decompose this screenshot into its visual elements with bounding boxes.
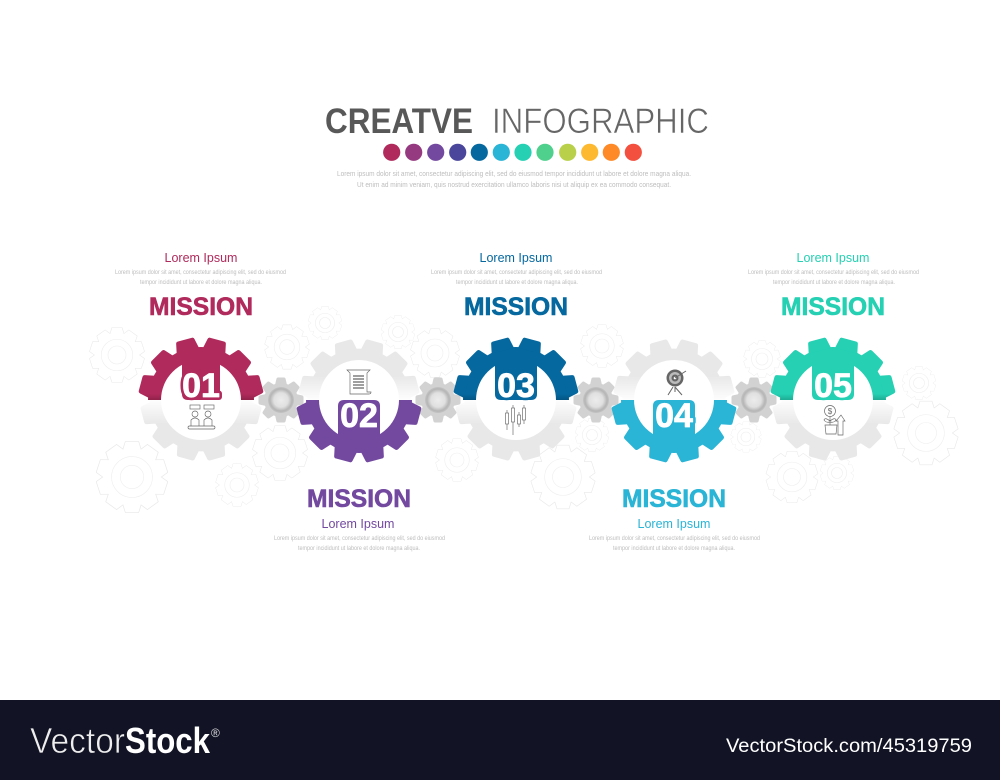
footer logo: Stock <box>125 720 211 761</box>
column 3 top text <box>431 251 602 321</box>
column 4 bottom text: tempor incididunt ut labore et dolore magna aliqua. <box>613 546 735 552</box>
number 05: 05 <box>814 367 852 405</box>
footer bar <box>0 700 1000 780</box>
step 01 gear <box>138 337 264 463</box>
step 03 gear <box>453 337 579 463</box>
title <box>325 102 709 141</box>
footer logo: Vector <box>30 720 125 761</box>
column 5 top text: Lorem ipsum dolor sit amet, consectetur adipiscing elit, sed do eiusmod <box>748 270 919 276</box>
number 05: 05 <box>814 367 852 405</box>
footer id: VectorStock.com/45319759 <box>726 736 972 757</box>
step 02 gear <box>296 337 422 463</box>
icon: money plant and arrow: $ <box>828 407 833 416</box>
title: INFOGRAPHIC <box>492 102 709 141</box>
column 5 top text <box>748 251 919 321</box>
icon: scroll <box>347 370 371 394</box>
footer logo: ® <box>211 726 220 740</box>
column 1 top text: MISSION <box>149 293 253 321</box>
number 03: 03 <box>497 367 535 405</box>
number 03: 03 <box>497 367 535 405</box>
footer logo <box>30 720 220 761</box>
number 02: 02 <box>340 397 378 435</box>
colour dots row <box>383 144 642 161</box>
column 1 top text: tempor incididunt ut labore et dolore magna aliqua. <box>140 280 262 286</box>
column 1 top text <box>115 251 286 321</box>
column 5 top text: MISSION <box>781 293 885 321</box>
column 1 top text: Lorem ipsum dolor sit amet, consectetur adipiscing elit, sed do eiusmod <box>115 270 286 276</box>
icon: target with arrow <box>666 370 686 395</box>
title: CREATVE <box>325 102 473 141</box>
step 05 gear <box>770 337 896 463</box>
column 4 bottom text: Lorem Ipsum <box>638 517 710 531</box>
number 01: 01 <box>182 367 220 405</box>
step 04 gear <box>611 337 737 463</box>
column 5 top text: tempor incididunt ut labore et dolore magna aliqua. <box>773 280 895 286</box>
column 5 top text: Lorem Ipsum <box>797 251 869 265</box>
column 2 bottom text: Lorem ipsum dolor sit amet, consectetur adipiscing elit, sed do eiusmod <box>274 536 445 542</box>
number 01: 01 <box>182 367 220 405</box>
icon: candlestick chart <box>506 405 526 435</box>
icon: two people at desk <box>188 405 215 429</box>
icon: money plant and arrow <box>824 406 845 435</box>
background outline gears <box>89 306 959 512</box>
intro text: Ut enim ad minim veniam, quis nostrud exercitation ullamco laboris nisi ut aliquip ex ea commodo consequat. <box>357 180 671 189</box>
intro text <box>337 169 691 189</box>
connector small gears <box>258 378 776 422</box>
column 2 bottom text: Lorem Ipsum <box>322 517 394 531</box>
number 02: 02 <box>340 397 378 435</box>
column 4 bottom text: MISSION <box>622 485 726 513</box>
column 3 top text: tempor incididunt ut labore et dolore magna aliqua. <box>456 280 578 286</box>
column 3 top text: Lorem Ipsum <box>480 251 552 265</box>
number 04: 04 <box>655 397 693 435</box>
column 4 bottom text: Lorem ipsum dolor sit amet, consectetur adipiscing elit, sed do eiusmod <box>589 536 760 542</box>
column 2 bottom text: MISSION <box>307 485 411 513</box>
column 2 bottom text <box>274 485 445 552</box>
column 4 bottom text <box>589 485 760 552</box>
column 3 top text: Lorem ipsum dolor sit amet, consectetur adipiscing elit, sed do eiusmod <box>431 270 602 276</box>
column 1 top text: Lorem Ipsum <box>165 251 237 265</box>
intro text: Lorem ipsum dolor sit amet, consectetur adipiscing elit, sed do eiusmod tempor incididunt ut labore et dolore magna aliqua. <box>337 169 691 178</box>
column 2 bottom text: tempor incididunt ut labore et dolore magna aliqua. <box>298 546 420 552</box>
column 3 top text: MISSION <box>464 293 568 321</box>
number 04: 04 <box>655 397 693 435</box>
